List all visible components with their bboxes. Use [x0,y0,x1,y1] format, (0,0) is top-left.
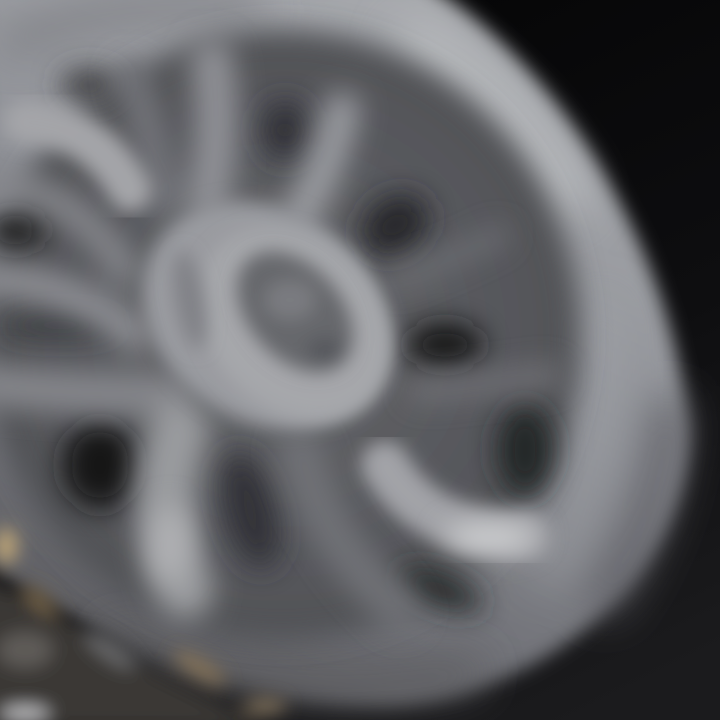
dark gaps between spokes [0,69,553,621]
hub centre opening [214,229,376,395]
hub outer ring [98,154,432,476]
spoke: upper left curved [25,122,130,190]
spokes [0,60,550,610]
hub groove shadow [168,248,212,352]
hub collar [159,189,431,461]
bottom-left brake detail [0,528,287,720]
spoke: lower right bright [385,465,525,535]
spoke highlights [150,505,536,585]
wheel inner dish [0,30,580,640]
